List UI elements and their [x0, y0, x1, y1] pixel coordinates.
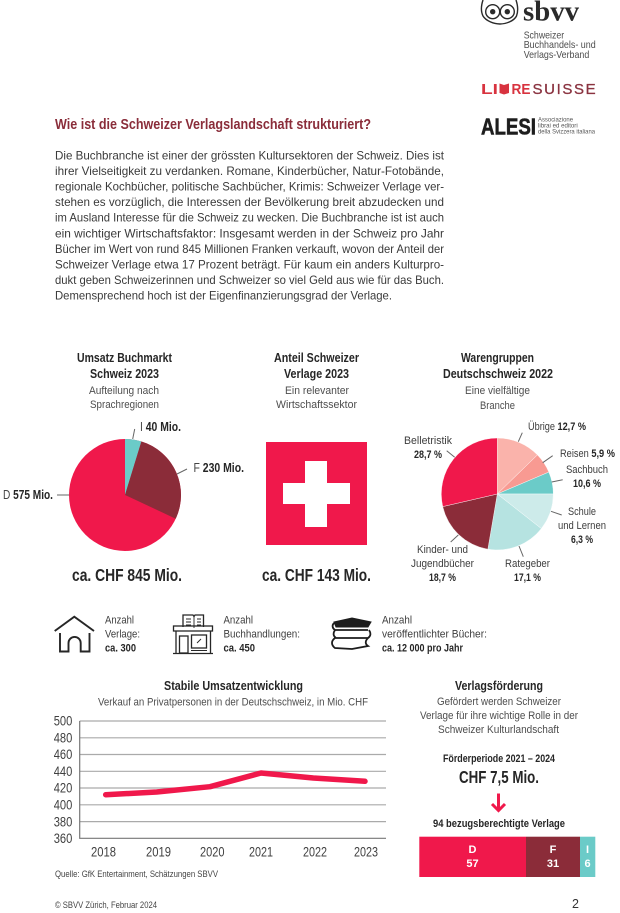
logo: SBVV owl and wordmark	[482, 0, 596, 61]
logo: Livresuisse: RE	[512, 81, 530, 98]
icon: bookshop	[173, 615, 213, 654]
text block: introduction: Demensprechend hoch ist der Eigenfinanzierungsgrad der Verlage.	[55, 289, 392, 303]
text block: introduction: Schweizer Verlage etwa 17 Prozent beträgt. Für kaum ein anders Kulturpro-	[55, 258, 444, 272]
logo: ALESI: librai ed editori	[538, 123, 578, 129]
text block: introduction: Bücher im Wert von rund 845 Millionen Franken verkauft, wovon der Anteil der	[55, 242, 444, 256]
line chart: 2019	[146, 845, 171, 860]
text block: introduction: stehen es vorzüglich, die Interessen der Bevölkerung breit abzudecken und	[55, 195, 444, 209]
title: Wie ist die Schweizer Verlagslandschaft strukturiert?	[55, 117, 371, 133]
line chart: 380	[54, 814, 72, 829]
line chart	[54, 714, 386, 860]
pie labels: Reisen 5,9 %	[560, 448, 615, 460]
heading	[274, 351, 359, 411]
text: Verlage: ca. 300	[105, 643, 136, 655]
text: Buchhandlungen: Buchhandlungen:	[224, 629, 300, 641]
total: ca. CHF 143 Mio.	[262, 565, 371, 585]
logo: Livresuisse	[481, 81, 596, 98]
pie labels: 6,3 %	[571, 534, 593, 546]
text: Buchhandlungen: Anzahl	[224, 615, 253, 627]
pie labels	[3, 420, 244, 502]
line chart: 2022	[303, 845, 327, 860]
text: Verlage	[105, 615, 140, 655]
line chart: 480	[54, 730, 72, 746]
text block: introduction: ein wichtiger Wirtschaftsfaktor: Insgesamt werden in der Schweiz pro Jahr	[55, 226, 444, 240]
text block: introduction: dukt geben Schweizerinnen und Schweizer so viel Geld aus wie für das Buch.	[55, 273, 444, 287]
heading: Aufteilung nach	[89, 385, 159, 397]
stacked bar: F	[550, 844, 557, 856]
association name: Buchhandels- und	[524, 39, 596, 51]
pie labels: Sachbuch	[566, 464, 608, 476]
heading: Wirtschaftssektor	[276, 399, 357, 411]
icon: house	[55, 617, 94, 652]
logo: Livresuisse: SUISSE	[532, 81, 596, 98]
stacked bar: I	[586, 844, 589, 856]
description	[420, 696, 578, 736]
panel: Warengruppen	[404, 351, 615, 584]
pie labels: 10,6 %	[573, 478, 601, 490]
association name: Verlags-Verband	[524, 49, 589, 61]
pie labels: 17,1 %	[514, 572, 541, 584]
description: Verlage für ihre wichtige Rolle in der	[420, 710, 578, 722]
heading: Schweiz 2023	[90, 367, 159, 381]
text block: introduction: Die Buchbranche ist einer der grössten Kultursektoren der Schweiz. Dies ist	[55, 148, 445, 162]
text: Bücher: Anzahl	[382, 615, 412, 627]
total: ca. CHF 845 Mio.	[72, 565, 182, 585]
heading: Deutschschweiz 2022	[443, 367, 553, 381]
line chart: 2018	[91, 845, 116, 860]
pie labels: Kinder- und	[417, 544, 468, 556]
heading: Verlage 2023	[284, 367, 349, 381]
arrow	[492, 794, 505, 810]
logo: ALESI: Associazione	[538, 117, 574, 123]
pie labels: Schule	[568, 506, 596, 518]
pie labels: I 40 Mio.	[140, 420, 181, 434]
association name	[524, 29, 596, 61]
description: Gefördert werden Schweizer	[437, 696, 561, 708]
pie labels: Belletristik	[404, 435, 452, 447]
text block: introduction	[55, 148, 445, 303]
logo: Livresuisse: LI	[481, 81, 498, 98]
line chart: 500	[54, 714, 72, 729]
pie labels: 18,7 %	[429, 572, 456, 584]
association name: Schweizer	[524, 29, 565, 41]
subheading: Verkauf an Privatpersonen in der Deutschschweiz, in Mio. CHF	[98, 697, 368, 709]
panel: Anteil Schweizer Verlage	[262, 351, 371, 585]
funding period: Förderperiode 2021 – 2024	[443, 753, 556, 765]
panel: Umsatz Buchmarkt	[3, 351, 244, 585]
line chart: 2020	[200, 845, 224, 860]
heading: Verlagsförderung	[455, 679, 543, 693]
stacked bar: D	[469, 844, 477, 856]
heading: Eine vielfältige	[465, 385, 530, 397]
heading: Warengruppen	[461, 351, 534, 365]
pie chart: product groups	[441, 438, 553, 550]
footer: copyright: © SBVV Zürich, Februar 2024	[55, 900, 157, 911]
text: Bücher	[382, 615, 487, 655]
heading: Branche	[480, 400, 515, 412]
text: Buchhandlungen	[224, 615, 300, 655]
heading: Sprachregionen	[90, 399, 159, 411]
source: Quelle: GfK Entertainment, Schätzungen SBVV	[55, 869, 219, 880]
heading: Stabile Umsatzentwicklung	[164, 679, 303, 693]
icon: owl	[482, 0, 518, 24]
heading	[443, 351, 553, 412]
text: Buchhandlungen: ca. 450	[224, 643, 255, 655]
page number: 2	[572, 897, 579, 911]
icon: stack of books	[332, 618, 371, 649]
line chart: 2021	[249, 845, 273, 860]
stacked bar: 31	[547, 858, 559, 870]
pie labels: Rategeber	[505, 558, 550, 570]
heading: Ein relevanter	[285, 385, 349, 397]
stacked bar: 57	[466, 858, 479, 870]
line chart: 440	[54, 764, 72, 779]
pie chart: language regions	[69, 439, 181, 551]
panel: key figures	[55, 615, 487, 655]
text: Bücher: veröffentlichter Bücher:	[382, 629, 487, 641]
text: Verlage: Verlage:	[105, 629, 140, 641]
text: Bücher: ca. 12 000 pro Jahr	[382, 643, 464, 655]
line chart: 420	[54, 781, 72, 796]
pie labels: Übrige 12,7 %	[528, 421, 586, 433]
heading: Anteil Schweizer	[274, 351, 359, 365]
pie labels: 28,7 %	[414, 449, 442, 461]
line chart: 360	[54, 831, 72, 846]
eligible publishers label: 94 bezugsberechtigte Verlage	[433, 818, 565, 830]
logo: ALESI	[481, 113, 596, 139]
pie labels: Jugendbücher	[411, 558, 474, 570]
text block: introduction: ihrer Vielseitigkeit zu verdanken. Romane, Kinderbücher, Natur-Fotobände,	[55, 164, 444, 178]
text block: introduction: regionale Kochbücher, politische Sachbücher, Krimis: Schweizer Verlage ver-	[55, 180, 444, 194]
line chart: 460	[54, 747, 72, 762]
logo: ALESI: ALESI	[481, 113, 536, 139]
logo: ALESI: della Svizzera italiana	[538, 130, 596, 136]
heading	[77, 351, 173, 411]
text block: introduction: im Ausland Interesse für die Schweiz zu wecken. Die Buchbranche ist ist auch	[55, 211, 444, 225]
pie labels: und Lernen	[558, 520, 606, 532]
pie labels: F 230 Mio.	[194, 461, 244, 475]
stacked bar: 6	[584, 858, 591, 870]
pie labels: D 575 Mio.	[3, 488, 53, 502]
line chart: 400	[54, 798, 72, 812]
line chart: 2023	[354, 845, 378, 860]
stacked bar	[419, 837, 595, 877]
funding amount: CHF 7,5 Mio.	[459, 767, 539, 787]
text: Verlage: Anzahl	[105, 615, 134, 627]
pie labels	[404, 421, 615, 584]
icon: Swiss flag	[266, 442, 367, 545]
panel: Stabile Umsatzentwicklung	[54, 679, 386, 880]
description: Schweizer Kulturlandschaft	[438, 724, 559, 736]
heading: Umsatz Buchmarkt	[77, 351, 173, 365]
panel: Verlagsförderung	[419, 679, 595, 877]
